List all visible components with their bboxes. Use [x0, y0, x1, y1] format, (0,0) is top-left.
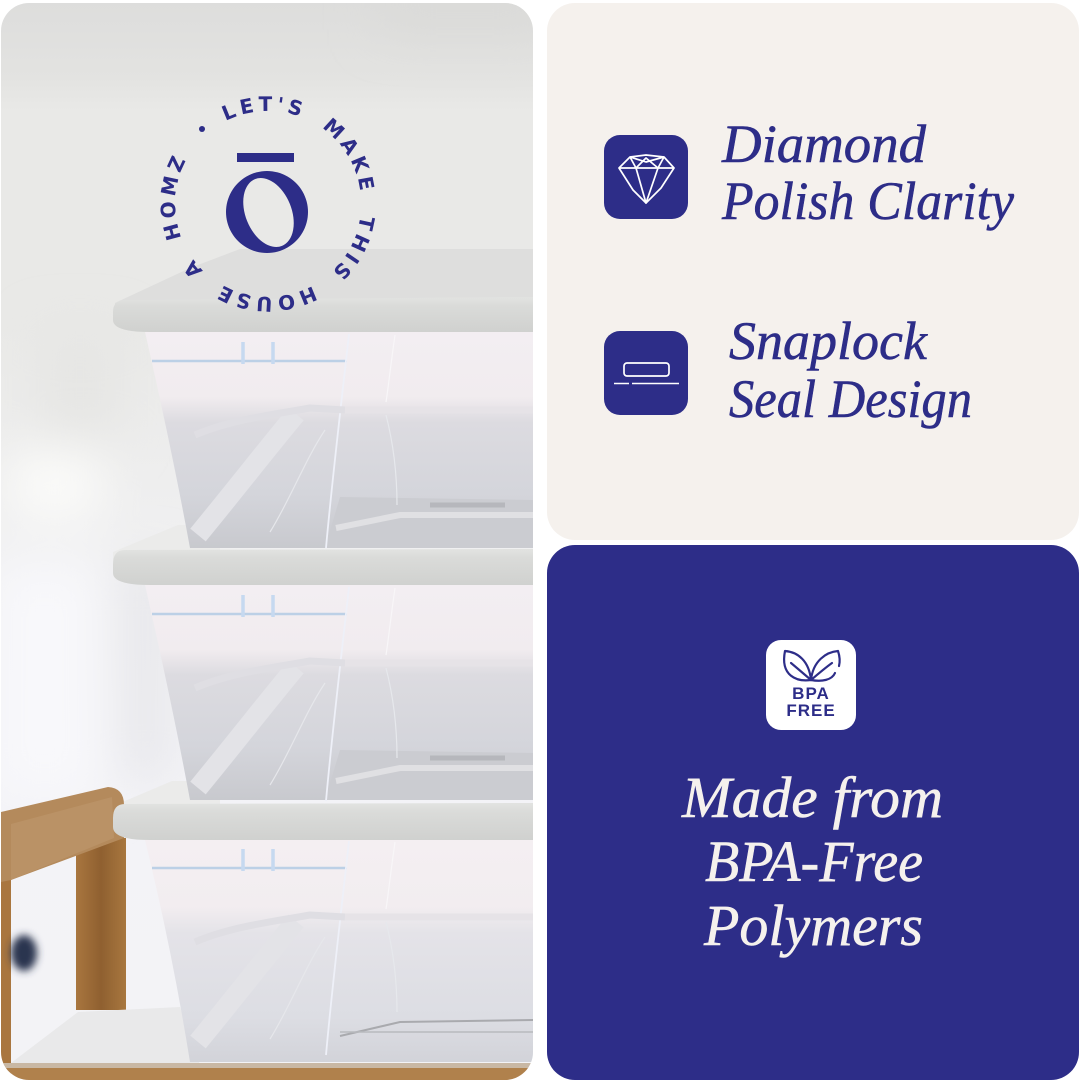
- icon: BPA free badge: FREE: [786, 701, 836, 720]
- heading: snaplock seal design: Seal Design: [729, 369, 972, 429]
- box 2 lid: [113, 549, 533, 585]
- circular slogan: LET'S MAKE THIS HOUSE A HOMZ: [160, 96, 376, 312]
- box 3 body: [145, 840, 533, 1062]
- wooden shelf edge: [1, 1063, 533, 1080]
- blurred background: [18, 460, 86, 628]
- panel: product photo: [0, 0, 550, 1080]
- heading: snaplock seal design: [729, 311, 972, 429]
- heading: made from BPA-free polymers: BPA-Free: [705, 829, 923, 894]
- heading: diamond polish clarity: Diamond: [721, 114, 927, 174]
- panel: features: [547, 3, 1079, 540]
- icon: diamond: [604, 135, 688, 219]
- wooden chair: [1, 787, 126, 1080]
- logo badge: [160, 96, 376, 312]
- box 3 lid: [113, 803, 533, 840]
- heading: snaplock seal design: Snaplock: [729, 311, 928, 371]
- heading: diamond polish clarity: Polish Clarity: [721, 171, 1014, 231]
- lid top surfaces: [124, 781, 220, 804]
- box 1 body: [145, 332, 533, 548]
- icon: snaplock seal: [604, 331, 688, 415]
- heading: diamond polish clarity: [721, 114, 1014, 231]
- icon: BPA free badge: [766, 640, 856, 730]
- icon: BPA free badge: BPA: [792, 684, 830, 703]
- heading: made from BPA-free polymers: Made from: [681, 765, 943, 830]
- box 2 body: [145, 585, 533, 801]
- heading: made from BPA-free polymers: [681, 765, 943, 958]
- heading: made from BPA-free polymers: Polymers: [703, 893, 923, 958]
- blurred dark object: [11, 935, 37, 971]
- logo mark: [226, 153, 308, 253]
- shelf surface: [11, 1007, 200, 1066]
- panel: BPA free: [547, 545, 1079, 1080]
- box 1 lid: [113, 249, 533, 332]
